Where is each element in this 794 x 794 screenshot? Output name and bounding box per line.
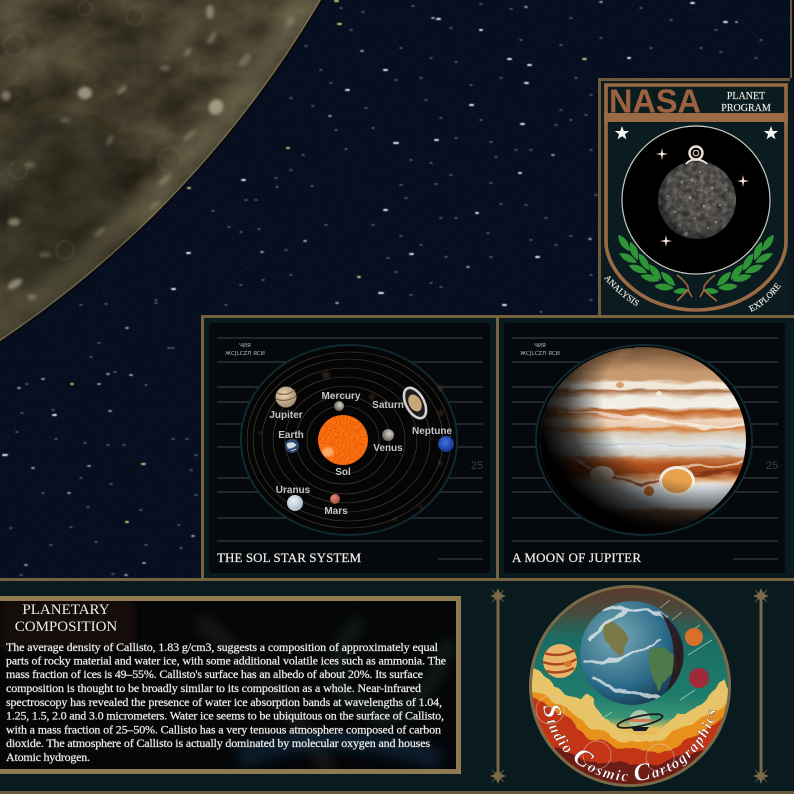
- orbit disc: [241, 345, 457, 535]
- small header glyphs: [225, 343, 265, 357]
- body text: mass fraction of ices is 49–55%. Callisto's surface has an albedo of about 20%. Its surface: [6, 667, 423, 681]
- planet: Earth: Earth: [278, 430, 304, 441]
- body text: spectroscopy has revealed the presence of water ice absorption bands at wavelengths of 1.04,: [6, 695, 442, 709]
- Callisto moon: [656, 160, 738, 240]
- program label: PROGRAM: [721, 103, 771, 114]
- planet: Mars: [324, 494, 348, 517]
- clouds: [532, 668, 728, 784]
- panel: the sol star system: [209, 323, 490, 573]
- label: explore: EXPLORE: [748, 282, 781, 312]
- small header glyphs: ЧИЯ: [534, 343, 546, 349]
- badge panel: NASA planet program: [598, 78, 794, 315]
- Jupiter: [530, 347, 756, 533]
- nebula wisps: [0, 601, 450, 770]
- laurel left: [615, 233, 689, 294]
- sun label: Sol: [335, 467, 351, 478]
- page number: 25: [766, 460, 778, 472]
- stars: [615, 126, 778, 139]
- bottom section backdrop: [0, 578, 794, 794]
- planet: Mercury: Mercury: [322, 391, 361, 402]
- astronaut icon: [686, 146, 707, 164]
- streaks: [600, 600, 712, 720]
- panel title: THE SOL STAR SYSTEM: [217, 550, 361, 565]
- shield outline: [606, 85, 786, 310]
- planet: Uranus: Uranus: [276, 485, 311, 496]
- body text: composition is thought to be broadly similar to its composition as a whole. Near-infrared: [6, 681, 421, 695]
- program label: [721, 91, 771, 114]
- laurel stems: [677, 275, 717, 301]
- curved studio name: Studio Cosmic Cartographics: [543, 705, 716, 782]
- planet: Jupiter: [269, 386, 303, 421]
- name flourishes: [536, 696, 674, 772]
- right edge gold strip: [790, 0, 792, 78]
- body text: dioxide. The atmosphere of Callisto is actually dominated by molecular oxygen and houses: [6, 736, 430, 750]
- sparkles: [656, 148, 749, 247]
- mini red planet: [689, 668, 709, 688]
- page number: 25: [471, 460, 483, 472]
- faint dust: [258, 371, 444, 521]
- mini saturn: [616, 710, 664, 732]
- ornamental bars: [490, 588, 769, 784]
- sun: [318, 415, 368, 465]
- orbits: [247, 352, 451, 528]
- planet: Neptune: Neptune: [412, 426, 452, 437]
- laurel right: [703, 233, 777, 294]
- NASA wordmark: NASA: [609, 82, 701, 120]
- heading: COMPOSITION: [15, 619, 117, 635]
- heading: [15, 602, 117, 635]
- small header glyphs: ЧИЯ: [239, 343, 251, 349]
- mini orange planet: [685, 628, 703, 646]
- logo disc: studio cosmic cartographics: [529, 585, 731, 787]
- top row panel backdrop: [201, 315, 794, 579]
- disc ring: [536, 345, 752, 535]
- small header glyphs: ЖСJLСZЛ ЯСИ: [520, 351, 560, 357]
- body text: parts of rocky material and water ice, with some additional volatile ices such as ammonia. The: [6, 654, 446, 668]
- planet: Uranus: [276, 485, 311, 511]
- body text: 1.25, 1.5, 2.0 and 3.0 micrometers. Water ice seems to be ubiquitous on the surface of Callisto,: [6, 708, 444, 722]
- planet: Mars: Mars: [324, 506, 348, 517]
- planet: Saturn: [372, 384, 431, 422]
- panel: planetary composition: [0, 596, 461, 774]
- moon shadow edge: [0, 0, 464, 518]
- mini jupiter: [543, 644, 577, 678]
- panel title: A MOON OF JUPITER: [512, 550, 641, 565]
- moon: large cratered limb: [0, 0, 321, 342]
- planet: Venus: [373, 429, 403, 454]
- small header glyphs: [520, 343, 560, 357]
- planet: Earth: [278, 430, 304, 453]
- heading: PLANETARY: [22, 602, 110, 618]
- planet: Venus: Venus: [373, 443, 403, 454]
- planet: Neptune: [412, 426, 454, 452]
- planet: Saturn: Saturn: [372, 400, 404, 411]
- header band: [604, 113, 788, 122]
- medallion ring: [622, 126, 770, 274]
- program label: PLANET: [727, 91, 765, 102]
- small header glyphs: ЖСJLСZЛ ЯСИ: [225, 351, 265, 357]
- shield frame: [604, 83, 788, 312]
- body text: [6, 640, 446, 764]
- body text: Atomic hydrogen.: [6, 750, 90, 764]
- planet: Jupiter: Jupiter: [269, 410, 303, 421]
- label: analysis: ANALYSIS: [604, 276, 640, 306]
- earth: [580, 601, 684, 705]
- planet: Mercury: [322, 391, 361, 411]
- panel: a moon of jupiter: [504, 323, 785, 573]
- body text: The average density of Callisto, 1.83 g/cm3, suggests a composition of approximately equal: [6, 640, 439, 654]
- body text: with a mass fraction of 25–50%. Callisto has a very tenuous atmosphere composed of carbon: [6, 722, 441, 736]
